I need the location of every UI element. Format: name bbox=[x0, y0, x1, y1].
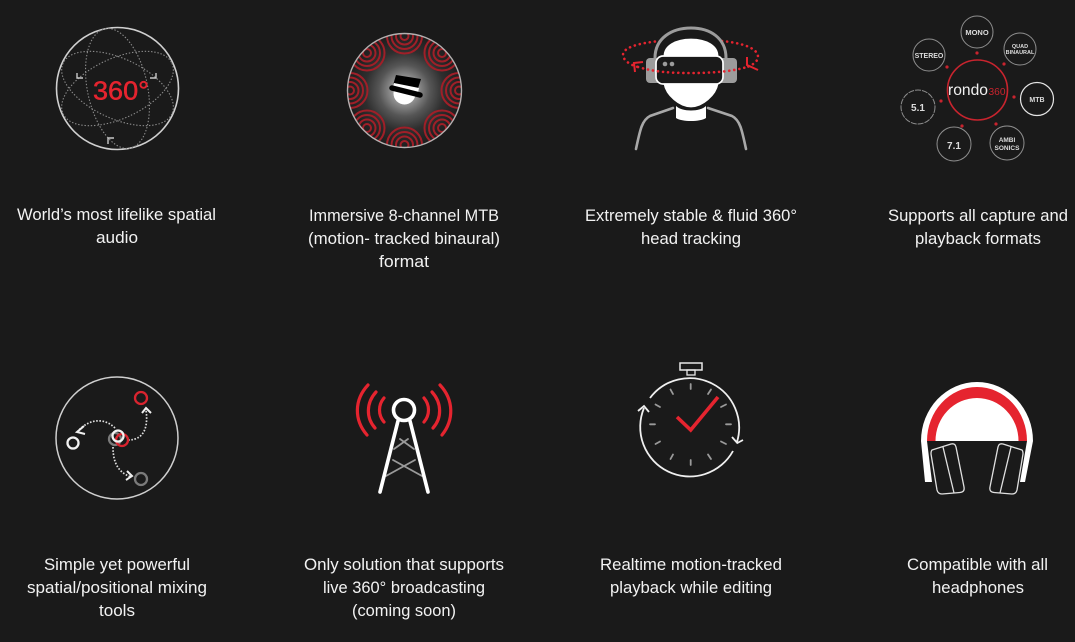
caption: formats: Supports all capture and bbox=[888, 206, 1068, 225]
caption: spatial audio bbox=[17, 205, 216, 247]
icon: format wheel: BINAURAL bbox=[1006, 50, 1035, 56]
caption: broadcasting: Only solution that supports bbox=[304, 555, 504, 574]
icon: format wheel: MONO bbox=[965, 28, 989, 37]
icon: spatial mixing bbox=[56, 377, 178, 499]
icon: 360 sphere: 360° bbox=[93, 76, 149, 106]
icon: format wheel: 5.1 bbox=[911, 103, 925, 114]
caption: formats: playback formats bbox=[915, 229, 1041, 248]
icon: format wheel: STEREO bbox=[915, 53, 944, 60]
icon: stopwatch bbox=[638, 363, 743, 476]
caption: mixing tools bbox=[27, 555, 207, 620]
icon: format wheel: rondo bbox=[948, 82, 988, 99]
icon: format wheel: MTB bbox=[1029, 97, 1045, 104]
caption: headphones: headphones bbox=[932, 578, 1024, 597]
caption: 8-channel MTB bbox=[308, 206, 500, 271]
caption: formats bbox=[888, 206, 1068, 248]
icon: format wheel: 7.1 bbox=[947, 141, 961, 152]
icon: format wheel: QUAD bbox=[1012, 44, 1028, 50]
caption: broadcasting: live 360° broadcasting bbox=[323, 578, 485, 597]
caption: spatial audio: audio bbox=[96, 228, 138, 247]
caption: broadcasting bbox=[304, 555, 504, 620]
icon: headphones bbox=[921, 382, 1033, 494]
caption: mixing tools: spatial/positional mixing bbox=[27, 578, 207, 597]
caption: mixing tools: Simple yet powerful bbox=[44, 555, 190, 574]
icon: broadcast tower bbox=[357, 385, 451, 492]
icon: format wheel bbox=[901, 16, 1054, 161]
icon: 360 sphere bbox=[50, 23, 185, 154]
caption: broadcasting: (coming soon) bbox=[352, 601, 456, 620]
caption: head tracking bbox=[585, 206, 797, 248]
caption: realtime playback: Realtime motion-tracked bbox=[600, 555, 782, 574]
icon: format wheel: 360 bbox=[988, 86, 1006, 98]
caption: headphones: Compatible with all bbox=[907, 555, 1048, 574]
caption: head tracking: head tracking bbox=[641, 229, 741, 248]
caption: mixing tools: tools bbox=[99, 601, 135, 620]
icon: 8-channel sound ball bbox=[346, 32, 462, 148]
caption: headphones bbox=[907, 555, 1048, 597]
icon: format wheel: AMBI bbox=[999, 137, 1015, 144]
caption: spatial audio: World’s most lifelike spatial bbox=[17, 205, 216, 224]
caption: realtime playback bbox=[600, 555, 782, 597]
icon: VR head tracking bbox=[623, 28, 758, 149]
caption: 8-channel MTB: format bbox=[379, 252, 429, 271]
icon: format wheel: SONICS bbox=[995, 145, 1020, 152]
caption: realtime playback: playback while editing bbox=[610, 578, 772, 597]
caption: 8-channel MTB: Immersive 8-channel MTB bbox=[309, 206, 499, 225]
caption: 8-channel MTB: (motion- tracked binaural) bbox=[308, 229, 500, 248]
caption: head tracking: Extremely stable & fluid 360° bbox=[585, 206, 797, 225]
